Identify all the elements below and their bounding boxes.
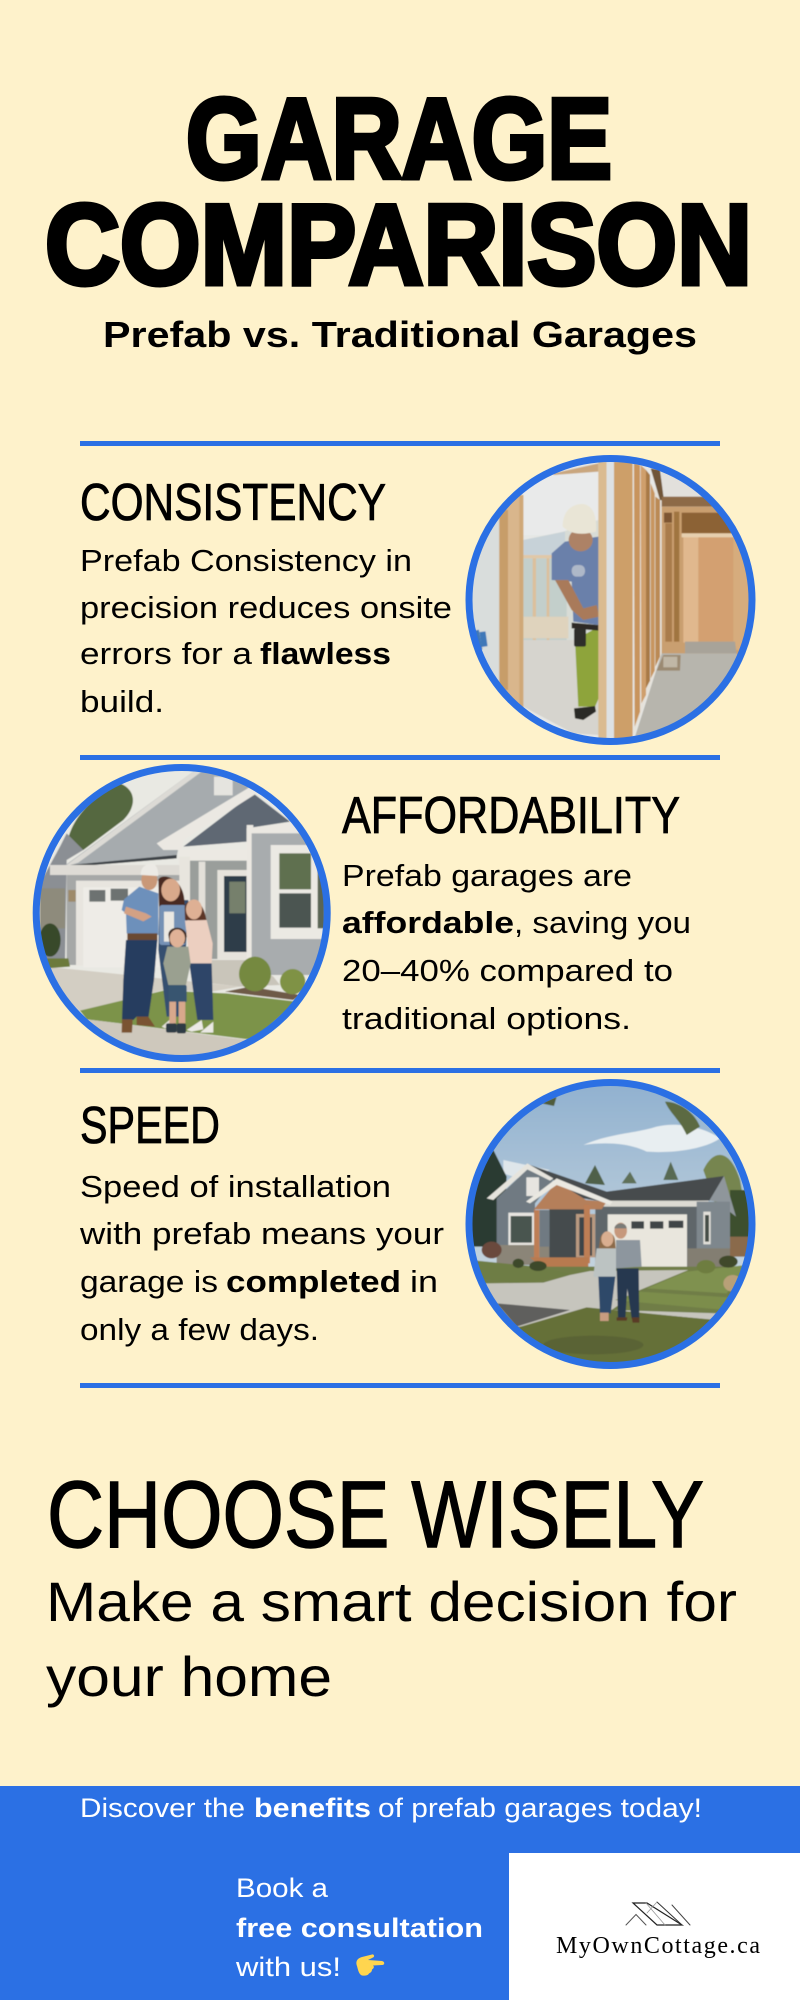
people [122, 864, 213, 1033]
title: GARAGE [186, 76, 612, 203]
text: discover benefits: of prefab garages today! [378, 1793, 702, 1823]
text block: affordability: , saving you [514, 906, 691, 940]
subtitle: Prefab vs. Traditional Garages [103, 314, 697, 355]
photo: builder in framed garage [472, 462, 748, 738]
text block: speed: in [410, 1265, 438, 1299]
logo panel [509, 1853, 800, 2000]
panel: affordability [27, 760, 691, 1067]
text: discover benefits: benefits [254, 1793, 371, 1823]
photo: couple in front of finished house [472, 1086, 748, 1362]
photo ring [469, 458, 752, 742]
text: discover benefits [80, 1793, 702, 1823]
text block: consistency: build. [80, 685, 164, 719]
panel: consistency [80, 453, 760, 747]
text block: consistency: errors for a [80, 637, 252, 671]
text block: consistency: Prefab Consistency in [80, 544, 412, 578]
text block: affordability: Prefab garages are [342, 859, 632, 893]
heading: speed: SPEED [80, 1097, 220, 1155]
text block: make a smart decision [46, 1570, 737, 1708]
couple [593, 1223, 642, 1323]
icon: logo roofline [626, 1902, 690, 1925]
text: discover benefits: Discover the [80, 1793, 245, 1823]
text: book a free consultation: free consultation [236, 1913, 483, 1943]
footer band [0, 1786, 800, 2000]
text block: consistency: precision reduces onsite [80, 591, 452, 625]
text: book a free consultation: Book a [236, 1873, 328, 1903]
text block: speed: completed [226, 1265, 401, 1299]
text block: affordability: 20–40% compared to [342, 954, 673, 988]
title [45, 76, 752, 309]
text block: affordability: affordable [342, 906, 514, 940]
text block: make a smart decision: your home [46, 1645, 332, 1708]
text block: affordability [342, 859, 691, 1036]
text block: consistency [80, 544, 452, 719]
photo ring [36, 768, 327, 1058]
photo ring [469, 1082, 752, 1366]
panel: speed [79, 1077, 760, 1370]
icon: pointing hand [356, 1954, 384, 1976]
text block: make a smart decision: Make a smart decision for [46, 1570, 737, 1633]
text block: speed: Speed of installation [80, 1170, 391, 1204]
heading: affordability: AFFORDABILITY [342, 787, 680, 845]
person [552, 504, 599, 720]
text block: speed: garage is [80, 1265, 218, 1299]
text block: affordability: traditional options. [342, 1002, 631, 1036]
text block: consistency: flawless [260, 637, 391, 671]
logo wordmark: MyOwnCottage.ca [556, 1933, 760, 1959]
photo: family with keys in front of house [40, 771, 324, 1055]
text block: speed: with prefab means your [79, 1217, 444, 1251]
title: COMPARISON [45, 182, 752, 309]
text: book a free consultation [235, 1873, 483, 1982]
text block: speed [79, 1170, 444, 1347]
text: book a free consultation: with us! [235, 1952, 341, 1982]
heading: consistency: CONSISTENCY [80, 474, 386, 532]
text block: speed: only a few days. [80, 1313, 319, 1347]
